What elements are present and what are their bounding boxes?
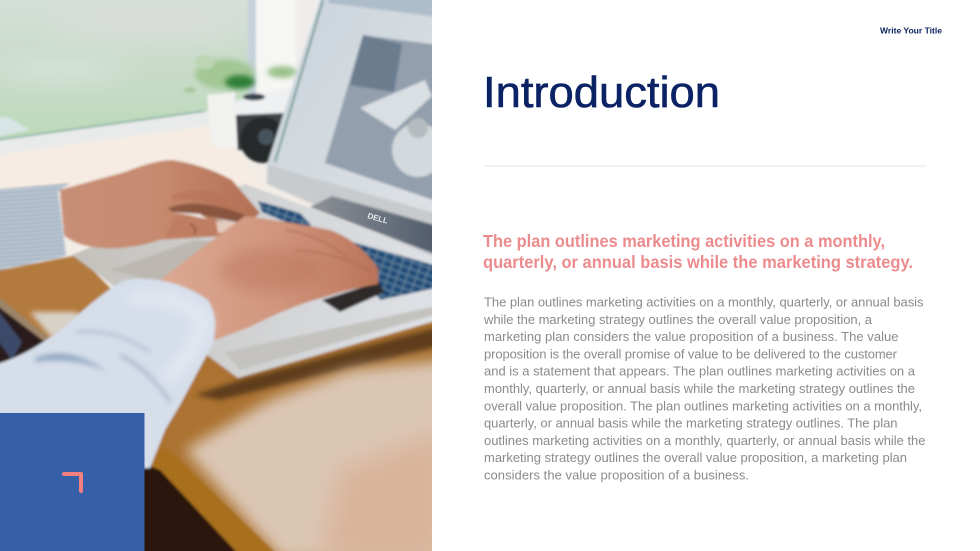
body paragraph: quarterly, or annual basis while the marketing strategy outlines. The plan xyxy=(484,416,898,431)
desk wood under the laptop xyxy=(0,255,445,551)
subtitle xyxy=(483,231,913,272)
laptop screen xyxy=(267,0,445,262)
title: Introduction xyxy=(483,68,720,117)
right hand on keys xyxy=(160,216,378,340)
subtitle: The plan outlines marketing activities on a monthly, xyxy=(483,231,885,251)
body paragraph: while the marketing strategy outlines the overall value proposition, a xyxy=(483,312,873,327)
photo: hands typing on a laptop xyxy=(0,0,445,551)
body paragraph: monthly, quarterly, or annual basis while the marketing strategy outlines the xyxy=(484,381,915,396)
body paragraph: outlines marketing activities on a monthly, quarterly, or annual basis while the xyxy=(484,433,926,448)
body paragraph: overall value proposition. The plan outlines marketing activities on a monthly, xyxy=(484,398,922,413)
divider line xyxy=(483,166,926,167)
body paragraph: considers the value proposition of a business. xyxy=(484,468,749,482)
header label: Write Your Title xyxy=(880,26,942,36)
laptop base xyxy=(72,184,445,378)
body paragraph: marketing strategy outlines the overall value proposition, a marketing plan xyxy=(484,450,907,465)
body paragraph: The plan outlines marketing activities on a monthly, quarterly, or annual basis xyxy=(484,294,924,310)
window with blurred garden xyxy=(0,0,326,141)
body paragraph: marketing plan considers the value proposition of a business. The value xyxy=(484,329,898,344)
subtitle: quarterly, or annual basis while the marketing strategy. xyxy=(483,252,913,272)
body paragraph: and is a statement that appears. The plan outlines marketing activities on a xyxy=(484,364,916,379)
plant xyxy=(184,55,297,93)
DELL logo on laptop: DELL xyxy=(366,211,389,226)
camera xyxy=(234,92,285,165)
left hand and striped cuff xyxy=(0,160,260,272)
shirt sleeve xyxy=(0,279,215,470)
flower pot xyxy=(207,92,236,148)
body paragraph: proposition is the overall promise of value to be delivered to the customer xyxy=(484,346,898,361)
window sill and white desk xyxy=(18,160,238,188)
blue accent square xyxy=(0,413,144,551)
icon: coral corner mark xyxy=(64,474,81,491)
body paragraph xyxy=(483,294,926,482)
keyboard xyxy=(258,201,445,312)
